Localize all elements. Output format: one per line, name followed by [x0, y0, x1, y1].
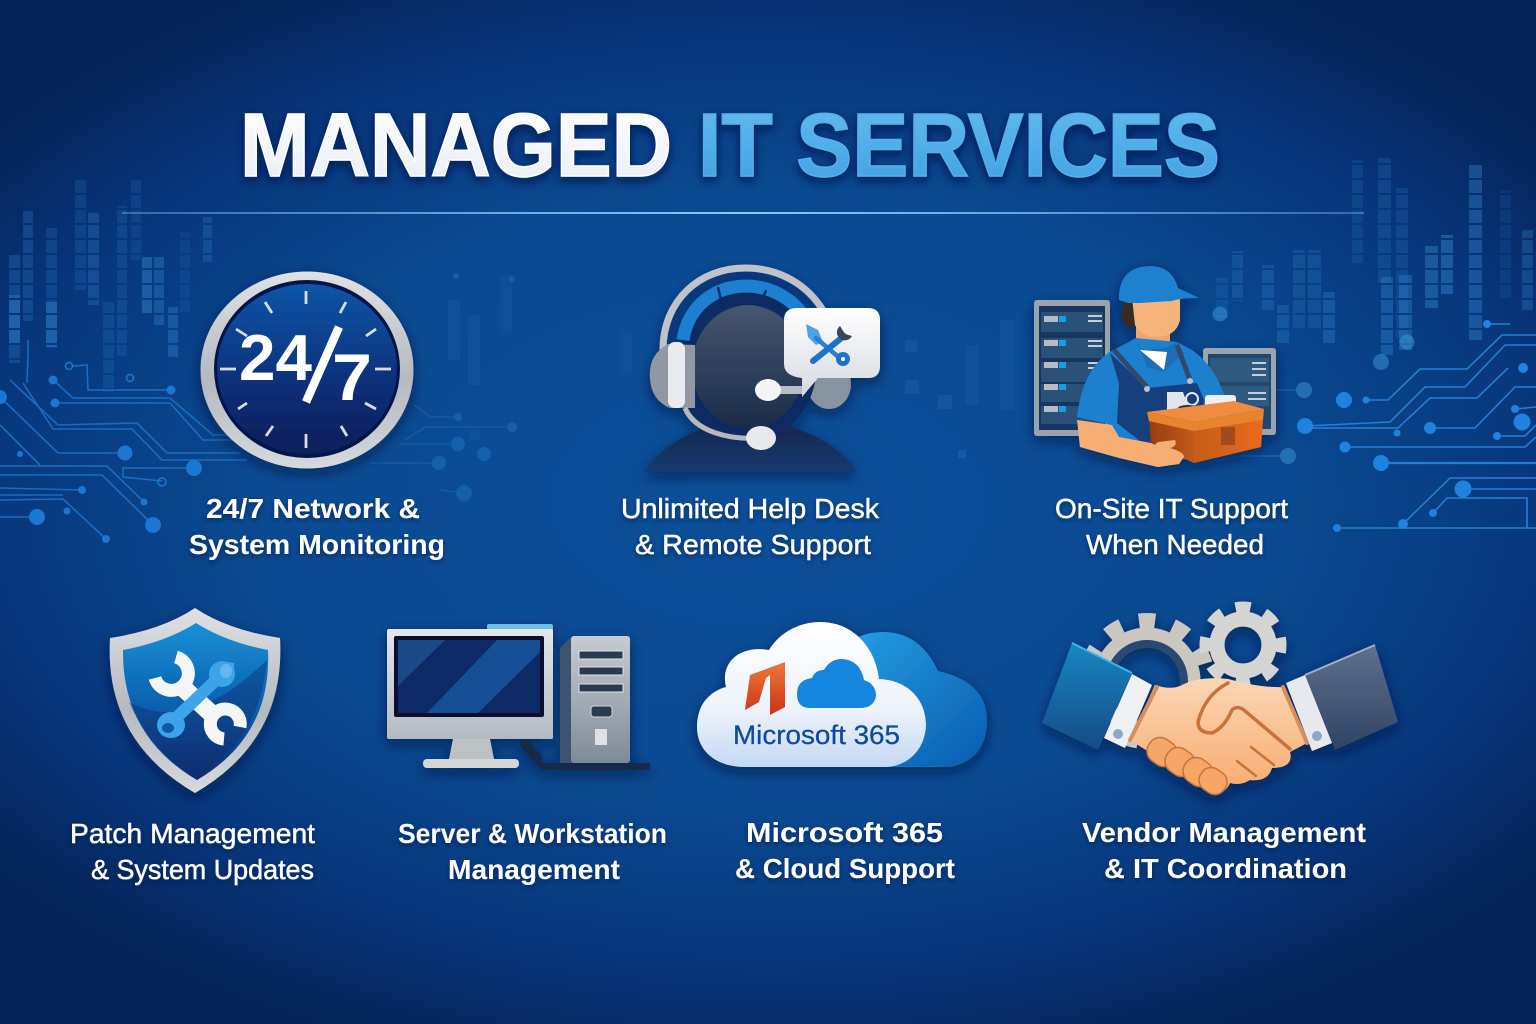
overalls [1110, 353, 1204, 450]
service: microsoft 365 [697, 622, 987, 884]
label: help desk: Unlimited Help Desk [621, 493, 880, 524]
arm [1077, 420, 1165, 467]
label: server workstation: Server & Workstation [398, 818, 667, 849]
label: patch management [70, 818, 315, 885]
icon: computer and tower [387, 624, 650, 770]
sleeves [1042, 643, 1132, 750]
fingers [1142, 733, 1231, 799]
rack left [1034, 300, 1110, 436]
hair and face [1122, 298, 1140, 328]
label: 24/7 network: System Monitoring [189, 529, 445, 560]
icon: cloud: Microsoft 365 [733, 720, 900, 750]
label: server workstation [398, 818, 667, 885]
neck [1136, 325, 1170, 355]
rack right [1203, 348, 1276, 435]
tower [560, 637, 576, 763]
collar and tee [1136, 338, 1184, 372]
white wrench [155, 657, 240, 739]
label: on-site: On-Site IT Support [1055, 493, 1288, 524]
service: help desk [621, 268, 880, 560]
shirt and sleeves [1077, 338, 1232, 460]
service: 24/7 monitoring [189, 272, 445, 560]
hands [1130, 678, 1307, 793]
background data blocks centre [448, 275, 1014, 458]
label: microsoft 365: & Cloud Support [735, 853, 955, 884]
label: 24/7 network [189, 493, 445, 560]
faint circuit right of clock [370, 273, 517, 501]
supplies [1167, 392, 1236, 412]
label: microsoft 365: Microsoft 365 [746, 817, 943, 848]
box [1147, 401, 1264, 422]
label: microsoft 365 [735, 817, 955, 884]
icon: clock: 7 [332, 340, 372, 414]
label: on-site [1055, 493, 1288, 560]
icon: cloud [697, 622, 987, 767]
label: help desk [621, 493, 880, 560]
title divider [122, 212, 1364, 214]
straps [1114, 350, 1147, 387]
title: IT SERVICES [698, 96, 1220, 196]
label: vendor: Vendor Management [1082, 817, 1366, 848]
label: server workstation: Management [448, 854, 620, 885]
title [240, 96, 1220, 196]
title: MANAGED [240, 96, 672, 196]
background data bars left [9, 180, 212, 392]
gears [1080, 600, 1288, 748]
circuit traces left [0, 340, 247, 539]
circuit nodes left [0, 362, 202, 543]
label: vendor [1082, 817, 1366, 884]
circuit traces right [1305, 324, 1536, 528]
service: patch management [70, 608, 315, 885]
icon: clock: 24 [239, 321, 312, 394]
icon: shield with wrench [110, 608, 280, 793]
service: vendor management [1042, 600, 1398, 884]
label: on-site: When Needed [1086, 529, 1264, 560]
service: on-site support [1034, 266, 1288, 560]
cap [1119, 266, 1199, 303]
background data bars right [1216, 158, 1533, 355]
blue wrench [157, 661, 235, 738]
hand [1146, 440, 1184, 467]
icon: clock [200, 272, 414, 468]
label: patch management: & System Updates [91, 854, 314, 885]
label: 24/7 network: 24/7 Network & [206, 493, 420, 524]
icon: headset agent [645, 268, 880, 472]
faint nodes right [1212, 306, 1414, 464]
label: vendor: & IT Coordination [1104, 853, 1347, 884]
label: help desk: & Remote Support [635, 529, 871, 560]
service: server and workstation [387, 624, 667, 885]
icon: technician with toolbox [1034, 266, 1276, 467]
hand lines [1130, 683, 1307, 776]
icon: handshake and gears [1042, 600, 1398, 799]
circuit nodes right [1297, 320, 1530, 532]
label: patch management: Patch Management [70, 818, 315, 849]
